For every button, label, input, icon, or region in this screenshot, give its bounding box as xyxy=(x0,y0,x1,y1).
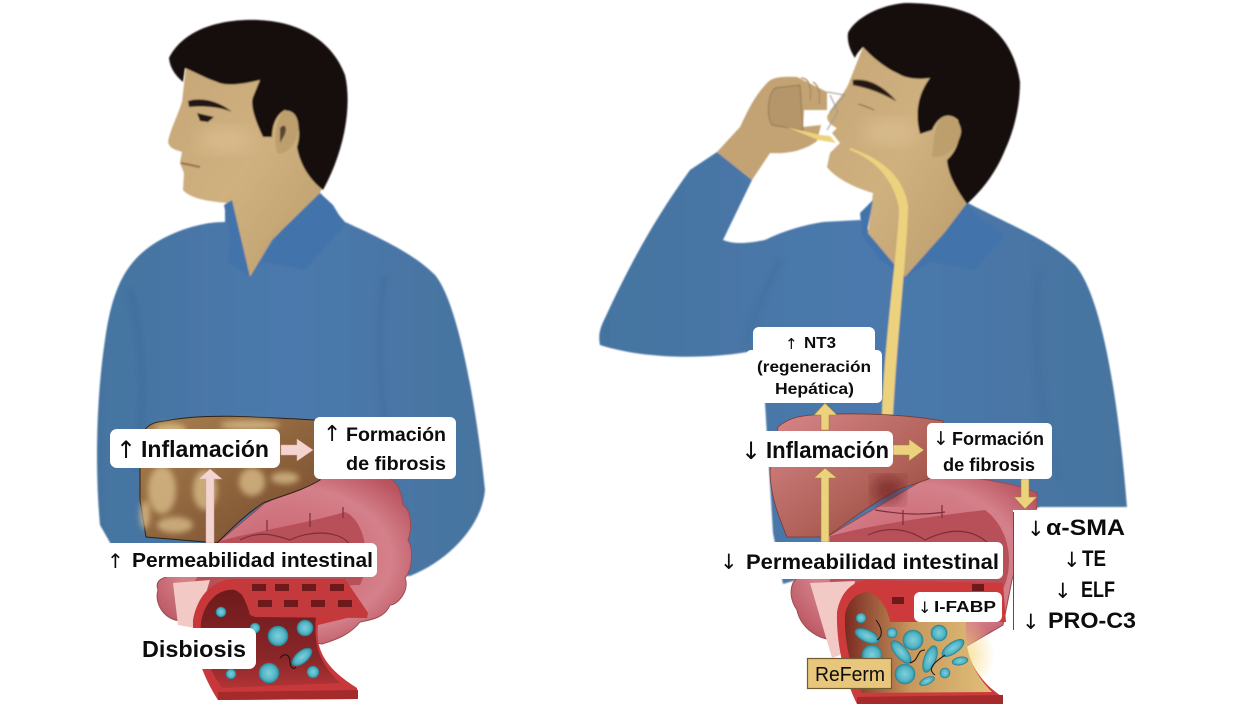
vessel lumen xyxy=(201,590,340,688)
arrow: permeability to inflammation xyxy=(814,468,837,542)
haustra lines xyxy=(240,507,350,545)
label: biomarkers list: ↓ xyxy=(1063,548,1081,572)
label: biomarkers list: PRO-C3 xyxy=(1048,608,1136,633)
label: ReFerm xyxy=(808,658,892,688)
figure: right man xyxy=(599,3,1127,584)
hand and wrist xyxy=(717,77,827,180)
arrow: fibrosis to markers xyxy=(1014,479,1037,509)
panel: before ReFerm, man with dysbiosis xyxy=(97,20,485,700)
organ: intestinal wall with bacteria xyxy=(173,579,368,700)
label: I-FABP: I-FABP xyxy=(934,599,996,616)
wall pores xyxy=(892,584,984,604)
cheek highlight xyxy=(197,126,253,154)
arrow: inflammation to NT3 xyxy=(814,403,837,430)
ear xyxy=(932,116,961,157)
neck and face xyxy=(827,47,967,277)
label: NT3 regeneración hepática: (regeneración xyxy=(757,359,871,376)
cheek highlight xyxy=(862,118,918,146)
panel: after ReFerm, man drinking xyxy=(599,3,1145,704)
vessel body xyxy=(837,580,1006,704)
small intestine xyxy=(830,510,1009,595)
label: biomarkers list: TE xyxy=(1082,546,1106,571)
label: Inflamación: ↑ xyxy=(116,436,136,464)
sleeve seam shading xyxy=(130,275,395,480)
pink sheath xyxy=(173,580,210,628)
wall pores xyxy=(252,584,352,607)
label: Permeabilidad intestinal: ↑ xyxy=(107,549,124,573)
neck and face xyxy=(168,60,323,277)
organ: fibrotic liver xyxy=(140,416,320,543)
vessel body xyxy=(193,579,368,700)
label: NT3 regeneración hepática: ↑ xyxy=(785,335,798,353)
label: biomarkers list: ↓ xyxy=(1022,610,1040,634)
label: Inflamación xyxy=(110,429,280,468)
arrow: inflammation to fibrosis xyxy=(281,439,313,461)
label: ReFerm: ReFerm xyxy=(815,664,885,686)
label: Formación de fibrosis xyxy=(314,417,456,479)
flagellum xyxy=(280,655,296,668)
arrow: permeability to inflammation xyxy=(199,469,222,543)
bottom edge xyxy=(857,695,1003,704)
label: Permeabilidad intestinal xyxy=(716,542,1003,579)
bacteria xyxy=(853,613,969,688)
glass base xyxy=(768,85,803,130)
vessel lip xyxy=(232,579,368,618)
label: biomarkers list xyxy=(1013,510,1145,634)
label: biomarkers list: ↓ xyxy=(1054,579,1072,603)
label: Formación de fibrosis: de fibrosis xyxy=(346,453,446,475)
label: Inflamación: Inflamación xyxy=(141,436,269,462)
label: Formación de fibrosis: Formación xyxy=(346,424,446,446)
label: I-FABP xyxy=(914,592,1002,622)
label: Formación de fibrosis xyxy=(927,423,1052,479)
label: Inflamación: Inflamación xyxy=(766,437,889,463)
label: biomarkers list: ELF xyxy=(1081,577,1115,602)
drink stream xyxy=(787,127,908,415)
organ: healthy liver xyxy=(770,414,950,537)
fibrosis speckles xyxy=(140,420,299,533)
ear shadow xyxy=(280,126,286,143)
hair xyxy=(848,3,1020,204)
label: biomarkers list: α-SMA xyxy=(1046,515,1125,540)
flagella xyxy=(876,620,945,675)
label: Permeabilidad intestinal: Permeabilidad intestinal xyxy=(132,550,373,572)
organ: intestinal wall with ReFerm bacteria xyxy=(810,580,1006,704)
collar xyxy=(860,200,1005,277)
label: Disbiosis xyxy=(134,628,256,669)
fingers xyxy=(801,78,819,104)
sweater and raised sleeve xyxy=(599,152,1127,584)
label: Disbiosis: Disbiosis xyxy=(142,636,246,662)
label: Formación de fibrosis: de fibrosis xyxy=(943,455,1035,475)
label: Formación de fibrosis: ↓ xyxy=(933,428,949,450)
label: Inflamación: ↓ xyxy=(741,437,761,465)
organs: colon xyxy=(157,473,412,644)
label: NT3 regeneración hepática xyxy=(746,327,882,403)
closed eye and eyebrow xyxy=(853,80,896,110)
colon outer xyxy=(157,473,412,644)
glass rim lines xyxy=(827,92,845,130)
pink sheath xyxy=(810,581,855,658)
bottom edge xyxy=(218,690,358,700)
arrow: inflammation to fibrosis xyxy=(893,439,924,461)
figure: left man xyxy=(97,20,485,576)
collar xyxy=(224,193,345,277)
vessel lumen xyxy=(845,592,992,693)
mouth xyxy=(181,163,200,167)
label: Permeabilidad intestinal: ↓ xyxy=(720,550,738,574)
label: Permeabilidad intestinal: Permeabilidad intestinal xyxy=(746,551,999,574)
label: Inflamación xyxy=(738,431,893,467)
label: biomarkers list: ↓ xyxy=(1027,517,1045,541)
label: Formación de fibrosis: Formación xyxy=(952,429,1044,449)
liver shadow xyxy=(872,476,904,504)
ear xyxy=(275,111,298,153)
bacteria xyxy=(216,607,319,683)
label: Formación de fibrosis: ↑ xyxy=(323,422,341,447)
organs: colon and intestine xyxy=(791,470,1037,650)
label: I-FABP: ↓ xyxy=(918,598,931,617)
label: NT3 regeneración hepática: Hepática) xyxy=(775,381,854,398)
haustra lines xyxy=(868,505,990,545)
sleeve seam shading xyxy=(745,260,1060,480)
label: NT3 regeneración hepática: NT3 xyxy=(804,335,836,352)
small intestine xyxy=(190,512,366,590)
eyebrow and eye xyxy=(188,99,232,122)
glow: ReFerm effect xyxy=(935,617,995,693)
sweater xyxy=(97,193,485,576)
label: Permeabilidad intestinal xyxy=(106,543,377,577)
hair xyxy=(169,20,348,190)
colon outer xyxy=(791,470,1037,650)
